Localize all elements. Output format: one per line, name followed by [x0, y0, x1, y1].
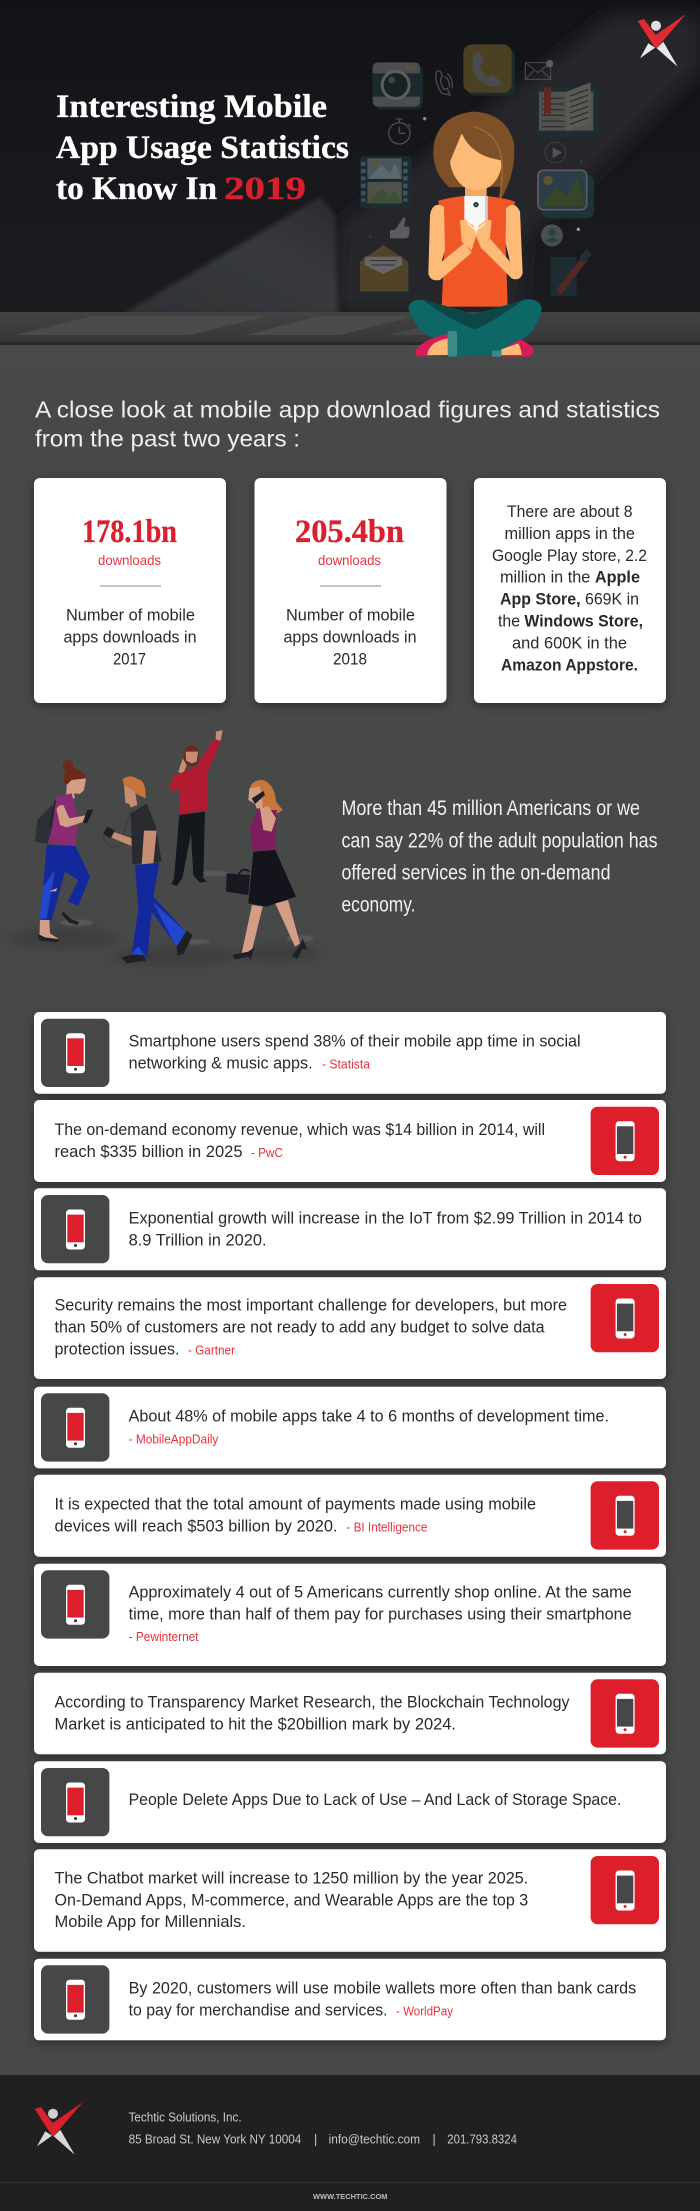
- stat card: 2018 downloads: [254, 478, 446, 703]
- hero title: [56, 89, 349, 207]
- stat row: security: than 50% of customers are not ready to add any budget to solve data: [54, 1319, 545, 1337]
- icon: phone dark tile: [41, 1393, 109, 1462]
- right shoe: [501, 339, 534, 357]
- hair strand: [473, 127, 502, 198]
- icon: profile: [541, 224, 563, 246]
- stat row: development time: [34, 1387, 666, 1468]
- ground highlights: [60, 870, 313, 944]
- left foot: [427, 338, 448, 355]
- stat row: security: - Gartner: [188, 1343, 236, 1358]
- stat row: development time: About 48% of mobile apps take 4 to 6 months of development time.: [129, 1407, 609, 1425]
- illustration: floating app icons: [360, 44, 599, 296]
- icon: phone dark tile: [41, 1768, 109, 1836]
- illustration: woman using phone: [408, 112, 542, 357]
- stat card: 2017 downloads: 2017: [113, 650, 146, 668]
- icon: phone dark tile: [41, 1195, 109, 1263]
- illustration: people on phones: [7, 730, 320, 966]
- text block: on-demand economy: offered services in the on-demand: [342, 862, 610, 884]
- stat card: 2018 downloads: 205.4bn: [295, 514, 404, 550]
- left arm: [428, 205, 472, 280]
- stat row: mobile payments: [34, 1475, 666, 1557]
- stat card: 2017 downloads: apps downloads in: [64, 628, 196, 646]
- logo: Techtic header: [638, 14, 686, 67]
- face: [450, 133, 502, 190]
- website: WWW.TECHTIC.COM: [313, 2192, 388, 2201]
- icon: phone red tile: [591, 1856, 659, 1924]
- stat card: app stores: There are about 8: [507, 503, 632, 521]
- icon: book: [537, 82, 599, 137]
- stat row: chatbot market: The Chatbot market will increase to 1250 million by the year 2025.: [54, 1869, 528, 1887]
- logo: Techtic footer: [35, 2102, 83, 2155]
- stat row: on-demand revenue: The on-demand economy revenue, which was $14 billion in 2014, will: [54, 1121, 545, 1139]
- icon: play button: [545, 142, 566, 163]
- stat card: app stores: and 600K in the: [512, 634, 627, 652]
- stat card: app stores: App Store, 669K in: [500, 590, 639, 608]
- stat card: app stores: the Windows Store,: [498, 612, 643, 630]
- person: man waving in red: [169, 730, 223, 886]
- company details: 201.793.8324: [447, 2132, 517, 2146]
- stat card: 2018 downloads: apps downloads in: [284, 628, 416, 646]
- stat row: online shopping: time, more than half of them pay for purchases using their smartphone: [129, 1605, 632, 1623]
- person: woman with backpack: [35, 760, 93, 942]
- stat row: online shopping: - Pewinternet: [129, 1629, 199, 1644]
- stat card: 2018 downloads: 2018: [333, 650, 367, 668]
- hair: [433, 112, 514, 201]
- icon: clipboard and pencil: [551, 252, 589, 296]
- text block: on-demand economy: economy.: [342, 894, 416, 916]
- stat card: 2017 downloads: Number of mobile: [66, 606, 195, 624]
- icon: phone dark tile: [41, 1965, 109, 2034]
- stat card: 2017 downloads: [34, 478, 226, 703]
- icon: thumbs up: [390, 217, 409, 238]
- stat row: IoT growth: 8.9 Trillion in 2020.: [129, 1231, 267, 1249]
- icon: phone red tile: [591, 1107, 659, 1175]
- stat card: 2018 downloads: Number of mobile: [286, 606, 415, 624]
- stat row: mobile wallets: [34, 1959, 666, 2040]
- right arm: [482, 205, 523, 279]
- ground shadows: [7, 928, 320, 966]
- stat row: chatbot market: [34, 1849, 666, 1952]
- intro heading: [35, 396, 660, 452]
- company details: info@techtic.com: [329, 2132, 420, 2146]
- stat row: on-demand revenue: [34, 1100, 666, 1182]
- stat row: social networking: - Statista: [322, 1056, 371, 1072]
- icon: phone dark tile: [41, 1019, 109, 1087]
- icon: phone red tile: [591, 1481, 659, 1550]
- stat row: mobile wallets: to pay for merchandise and services.: [129, 2002, 388, 2020]
- icon: film strip: [360, 156, 412, 208]
- stat row: development time: - MobileAppDaily: [129, 1431, 219, 1446]
- right foot: [501, 343, 522, 355]
- stat row: mobile wallets: - WorldPay: [396, 2004, 453, 2019]
- text block: on-demand economy: More than 45 million Americans or we: [342, 797, 640, 820]
- cuffs: [448, 331, 501, 357]
- stat card: app stores: [474, 478, 666, 703]
- company details: 85 Broad St. New York NY 10004: [129, 2132, 301, 2146]
- icon: phone red tile: [591, 1679, 659, 1748]
- phone: [464, 196, 488, 235]
- stat row: mobile wallets: By 2020, customers will use mobile wallets more often than bank cards: [129, 1980, 636, 1998]
- stat row: on-demand revenue: - PwC: [251, 1145, 283, 1160]
- stat card: app stores: million apps in the: [504, 525, 635, 543]
- stat row: chatbot market: Mobile App for Millennials.: [54, 1913, 246, 1931]
- icon: camera: [373, 62, 423, 109]
- stat card: 2018 downloads: downloads: [318, 552, 381, 568]
- icon: phone app: [463, 44, 515, 96]
- person: man with earphones: [103, 776, 193, 963]
- hero banner: [0, 0, 700, 370]
- stat card: app stores: Google Play store, 2.2: [492, 547, 647, 565]
- stat row: blockchain: According to Transparency Market Research, the Blockchain Technology: [54, 1693, 570, 1711]
- stat row: IoT growth: [34, 1188, 666, 1270]
- stat card: app stores: million in the Apple: [500, 568, 640, 586]
- company details: |: [432, 2132, 436, 2146]
- stat row: security: Security remains the most important challenge for developers, but more: [54, 1297, 567, 1315]
- hero title: 2019: [224, 171, 306, 207]
- stat row: IoT growth: Exponential growth will increase in the IoT from $2.99 Trillion in 2014 to: [129, 1209, 642, 1227]
- icon: stopwatch: [389, 119, 411, 144]
- stat row: mobile payments: devices will reach $503 billion by 2020.: [54, 1518, 338, 1536]
- stat row: on-demand revenue: reach $335 billion in 2025: [54, 1143, 242, 1161]
- stat row: online shopping: Approximately 4 out of 5 Americans currently shop online. At the same: [129, 1583, 632, 1601]
- stat card: app stores: Amazon Appstore.: [501, 656, 638, 674]
- icon: phone red tile: [591, 1284, 659, 1352]
- orange top: [438, 196, 515, 307]
- icon: phone dark tile: [41, 1570, 109, 1639]
- text block: on-demand economy: [342, 797, 658, 916]
- stat card: 2017 downloads: 178.1bn: [82, 514, 177, 550]
- stat row: social networking: [34, 1012, 666, 1094]
- stat row: chatbot market: On-Demand Apps, M-commerce, and Wearable Apps are the top 3: [54, 1891, 528, 1909]
- trousers shade: [423, 299, 524, 329]
- person: woman with handbag: [226, 780, 307, 960]
- stat row: social networking: networking & music apps.: [129, 1055, 313, 1073]
- stat row: mobile payments: - BI Intelligence: [346, 1520, 427, 1535]
- stat row: social networking: Smartphone users spend 38% of their mobile app time in social: [129, 1033, 581, 1051]
- icon: picture: [538, 170, 594, 218]
- hero title: App Usage Statistics: [56, 130, 349, 166]
- stat row: deleting apps: People Delete Apps Due to Lack of Use – And Lack of Storage Space.: [129, 1791, 621, 1809]
- left shoe: [415, 334, 448, 357]
- stat row: security: protection issues.: [54, 1341, 180, 1359]
- stat row: deleting apps: [34, 1761, 666, 1843]
- company details: Techtic Solutions, Inc.: [129, 2110, 242, 2124]
- stat row: blockchain: [34, 1673, 666, 1754]
- hero title: to Know In: [56, 171, 217, 207]
- icon: envelope: [360, 245, 409, 294]
- hero title: Interesting Mobile: [56, 89, 327, 125]
- neck: [465, 182, 487, 200]
- footer: [0, 2075, 700, 2211]
- stat row: mobile payments: It is expected that the total amount of payments made using mobile: [54, 1496, 536, 1514]
- trousers: [408, 299, 542, 357]
- icon: phone outline: [436, 71, 452, 95]
- hands: [460, 219, 492, 251]
- icon: mail: [525, 60, 553, 79]
- intro heading: A close look at mobile app download figures and statistics: [35, 396, 660, 422]
- company details: [129, 2110, 517, 2146]
- stat row: online shopping: [34, 1564, 666, 1666]
- company details: |: [314, 2132, 317, 2146]
- stat row: security: [34, 1277, 666, 1379]
- stat row: blockchain: Market is anticipated to hit the $20billion mark by 2024.: [54, 1715, 456, 1733]
- fingers: [467, 219, 485, 229]
- intro heading: from the past two years :: [35, 426, 300, 452]
- stat card: 2017 downloads: downloads: [98, 552, 161, 568]
